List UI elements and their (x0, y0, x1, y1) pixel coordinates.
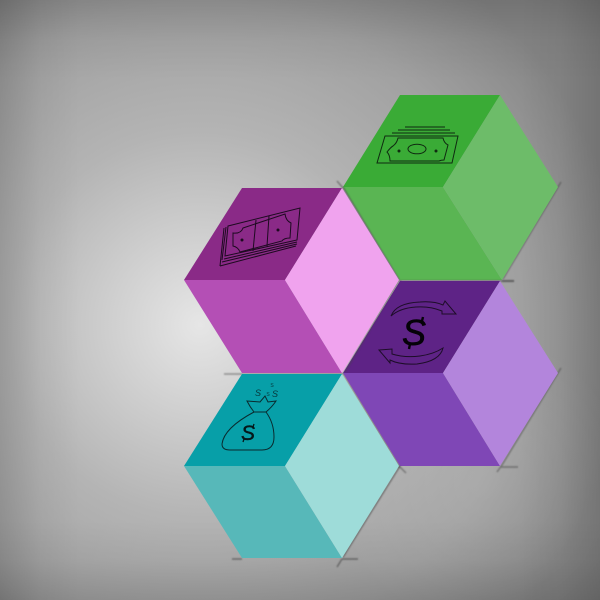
icon: banknote bundle (220, 208, 300, 266)
panel: magenta cube (184, 187, 399, 374)
icon: banknote stack (377, 127, 458, 163)
icon: money bag: S (255, 388, 261, 398)
icon: money bag: S (266, 392, 270, 398)
panel: teal cube (184, 374, 400, 567)
icon: exchange arrows and dollar (379, 301, 456, 364)
icon: money bag: S (272, 389, 278, 399)
icon: money bag: S (270, 383, 274, 389)
icon: exchange arrows and dollar: S (402, 312, 426, 353)
panel: green cube (337, 95, 561, 281)
panel: violet cube (343, 281, 561, 473)
icon: money bag (222, 383, 278, 450)
icon: money bag: S (241, 422, 255, 445)
